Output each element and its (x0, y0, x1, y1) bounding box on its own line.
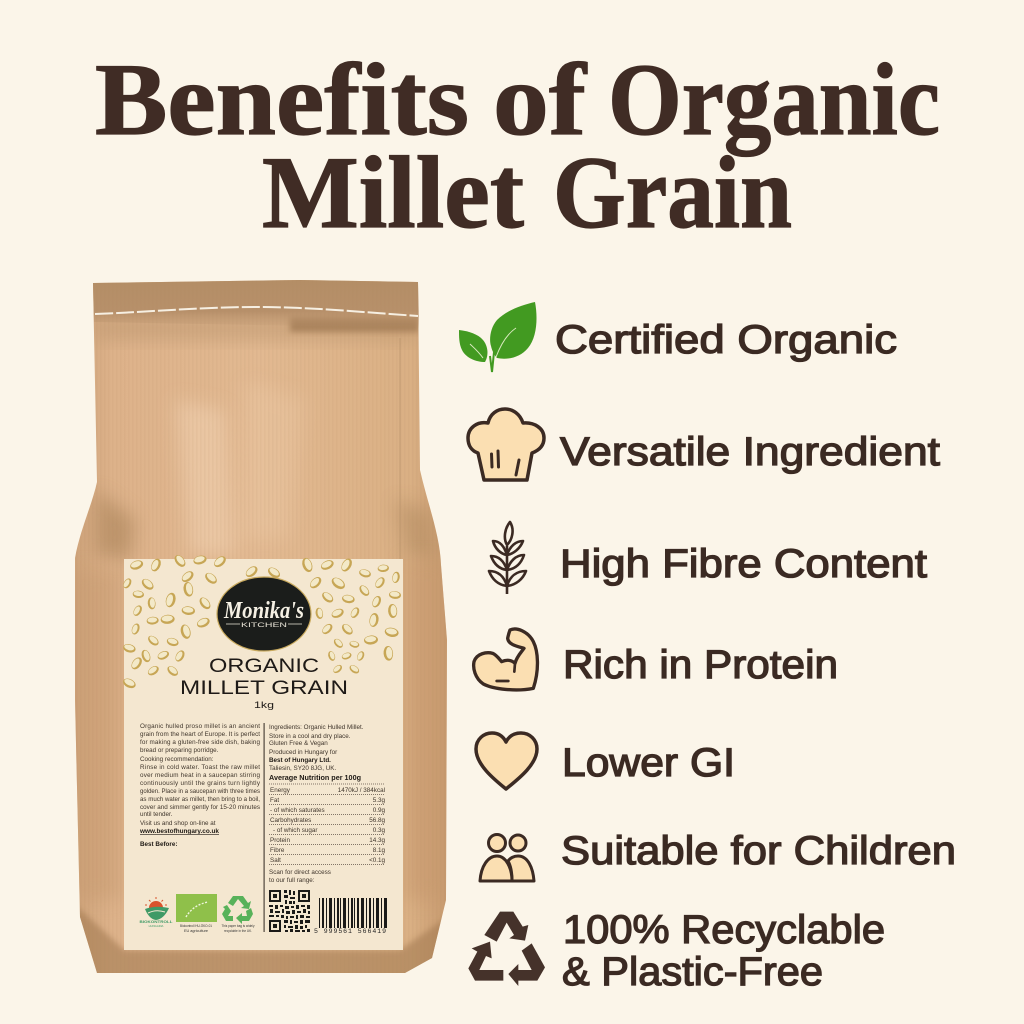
nutrition table: 1470kJ / 384kcal (338, 787, 385, 794)
label: Lower GI (562, 741, 735, 785)
benefit: Certified Organic (459, 302, 897, 372)
nutrition table: Carbohydrates (270, 817, 311, 824)
QR code (269, 890, 310, 932)
certification: recycling (222, 896, 255, 933)
label: Rich in Protein (563, 643, 838, 687)
left description column: Rinse in cold water. Toast the raw millet (140, 764, 260, 771)
left description column: Organic hulled proso millet is an ancient (140, 723, 260, 730)
icon: heart (476, 733, 537, 789)
certification: EU organic leaf: EU agriculture (184, 929, 208, 933)
certification: Biokontroll: HUNGARIA (149, 924, 164, 928)
right ingredients column (269, 724, 364, 772)
product name: ORGANIC (209, 656, 319, 677)
icon: green leaves (459, 302, 537, 372)
left description column: Best Before: (140, 841, 177, 848)
label: High Fibre Content (560, 542, 927, 586)
left description column: golden. Place in a saucepan with three times (140, 788, 260, 795)
nutrition table: 0.3g (373, 827, 385, 834)
nutrition table: 56.8g (369, 817, 385, 824)
icon: recycle arrows (468, 912, 545, 986)
product label (121, 553, 403, 950)
logo: Monika's Kitchen: Monika's (223, 598, 304, 624)
product name (180, 656, 348, 711)
title: of (493, 43, 588, 157)
scattered millet grains (121, 553, 401, 690)
scan note: to our full range: (269, 877, 315, 884)
icon: flexed arm (474, 629, 537, 690)
product name: MILLET GRAIN (180, 678, 348, 699)
left description column: Visit us and shop on-line at (140, 820, 216, 827)
right ingredients column: Taliesin, SY20 8JG, UK. (269, 765, 336, 772)
benefit: Versatile Ingredient (468, 409, 940, 480)
title: Organic (608, 43, 940, 157)
benefit: Rich in Protein (474, 629, 838, 690)
certification: EU organic leaf: Biokontroll HU-ÖKO-01 (180, 924, 212, 928)
left description column: Cooking recommendation: (140, 756, 214, 763)
barcode: 5 999561 566419 (314, 928, 386, 935)
icon: chef hat (468, 409, 544, 480)
nutrition table: 5.3g (373, 797, 385, 804)
benefit: 100% Recyclable & Plastic-Free (468, 908, 885, 994)
column divider (264, 723, 265, 932)
benefit: High Fibre Content (489, 522, 927, 594)
nutrition table: Fibre (270, 847, 285, 854)
right ingredients column: Produced in Hungary for (269, 749, 337, 756)
certification: recycling: This paper bag is widely (222, 924, 255, 928)
right ingredients column: Best of Hungary Ltd. (269, 757, 331, 764)
label: 100% Recyclable (563, 908, 885, 952)
title (95, 43, 940, 250)
bag shading folds (70, 315, 450, 980)
scan note: Scan for direct access (269, 869, 331, 876)
title: Benefits (95, 43, 469, 157)
bag body (75, 280, 447, 973)
label (562, 908, 885, 994)
nutrition table: - of which saturates (270, 807, 325, 814)
side crease (399, 338, 401, 560)
certification: recycling: recyclable in the UK. (224, 929, 252, 933)
title: Millet (262, 136, 524, 250)
logo: Monika's Kitchen (217, 577, 311, 651)
certification: Biokontroll: BIOKONTROLL (140, 919, 173, 924)
nutrition table: 14.3g (369, 837, 385, 844)
nutrition table: Energy (270, 787, 291, 794)
label: & Plastic-Free (562, 950, 823, 994)
logo: Monika's Kitchen: KITCHEN (241, 622, 287, 629)
nutrition table: Salt (270, 857, 281, 864)
left description column: www.bestofhungary.co.uk (139, 828, 220, 835)
nutrition table: Average Nutrition per 100g (269, 775, 361, 782)
scan note (269, 869, 331, 884)
title: Grain (553, 136, 792, 250)
nutrition table (269, 775, 385, 864)
label: Versatile Ingredient (560, 430, 940, 474)
certification: EU organic leaf (176, 894, 217, 933)
nutrition table: <0.1g (369, 857, 385, 864)
left description column: for making a gluten-free side dish, baking (140, 739, 260, 746)
nutrition table: Protein (270, 837, 290, 844)
icon: wheat (489, 522, 526, 594)
nutrition table: - of which sugar (273, 827, 317, 834)
bag top fold (93, 280, 419, 328)
left description column: over medium heat in a saucepan stirring (140, 772, 260, 779)
left description column (139, 723, 261, 848)
right ingredients column: Store in a cool and dry place. (269, 733, 351, 740)
label: Certified Organic (555, 318, 897, 362)
benefit: Suitable for Children (480, 829, 956, 881)
stitching (95, 307, 418, 316)
left description column: bread or preparing porridge. (140, 747, 219, 754)
nutrition table: 8.1g (373, 847, 385, 854)
benefit: Lower GI (476, 733, 735, 789)
kraft ribs (75, 280, 447, 973)
product: kraft paper bag (70, 280, 450, 980)
icon: two children (480, 834, 534, 881)
label panel (124, 559, 403, 950)
nutrition table: 0.9g (373, 807, 385, 814)
nutrition table: Fat (270, 797, 279, 804)
product name: 1kg (254, 700, 274, 711)
left description column: grain from the heart of Europe. It is perfect (140, 731, 260, 738)
right ingredients column: Gluten Free & Vegan (269, 740, 328, 747)
left description column: cover and simmer gently for 15-20 minutes (140, 804, 260, 811)
barcode (314, 898, 387, 935)
left description column: as much water as millet, then bring to a boil, (140, 796, 260, 803)
left description column: until tender. (140, 811, 173, 818)
label: Suitable for Children (561, 829, 956, 873)
certification: Biokontroll (140, 897, 173, 928)
left description column: continuously until the grains turn lightly (140, 780, 261, 787)
right ingredients column: Ingredients: Organic Hulled Millet. (269, 724, 364, 731)
